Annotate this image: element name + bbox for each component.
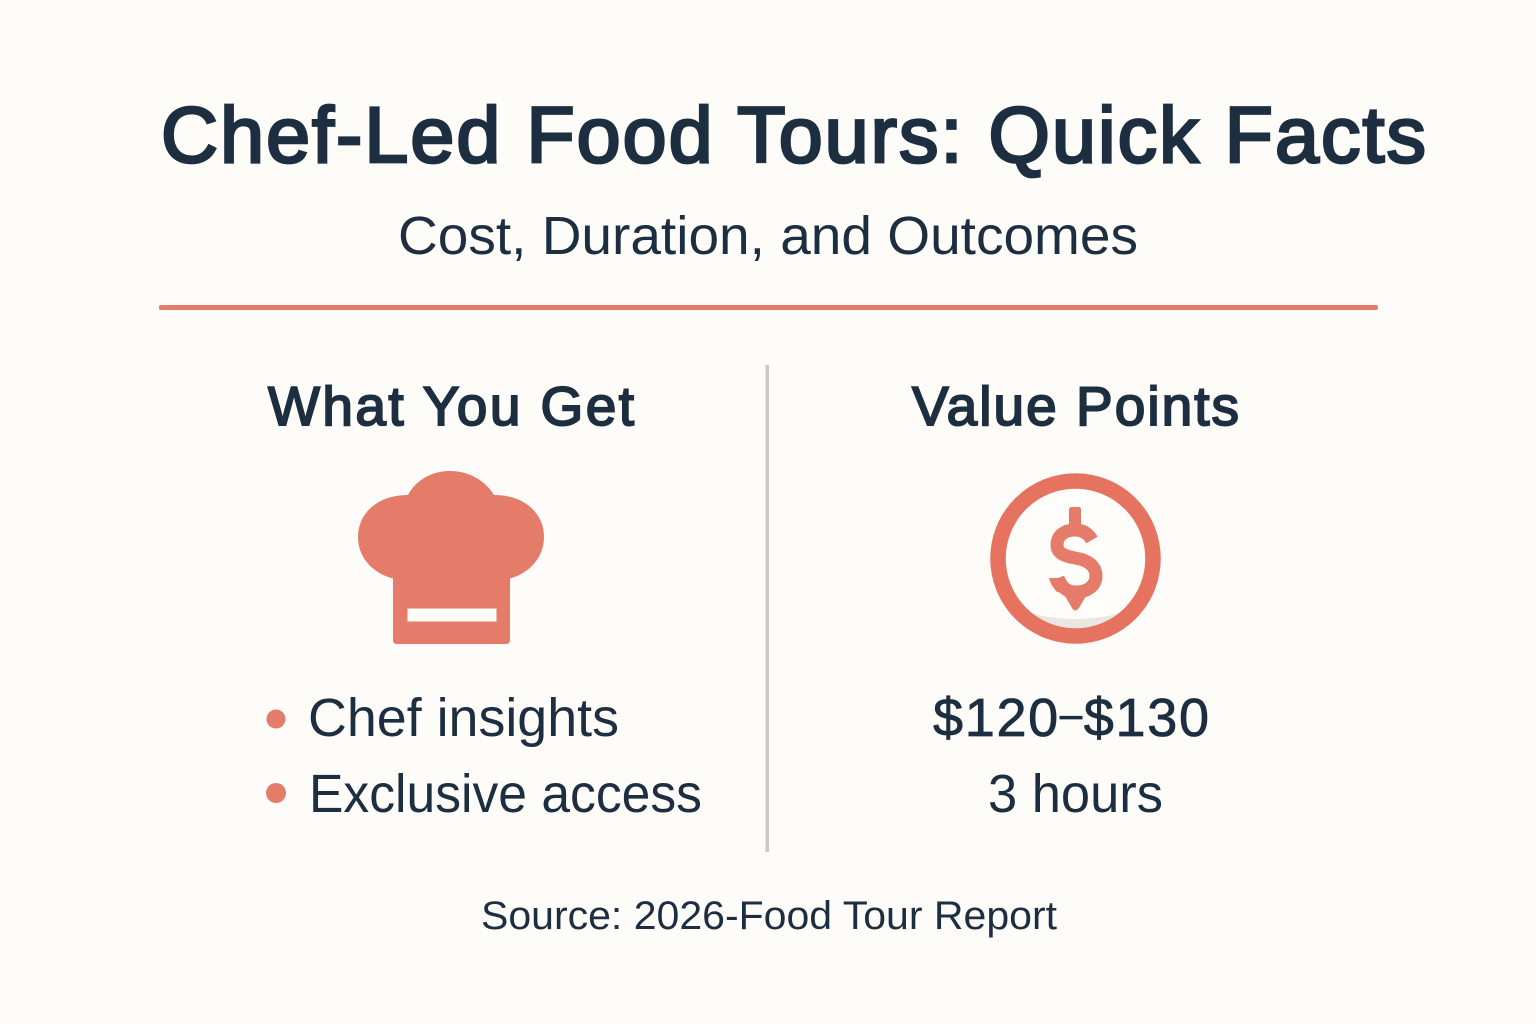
- price range: –: [1060, 693, 1083, 737]
- bullet: chef insights: Chef insights: [308, 688, 619, 748]
- duration: 3 hours: [988, 764, 1163, 824]
- price range: $130: [1084, 688, 1209, 748]
- subtitle: Cost, Duration, and Outcomes: [398, 206, 1138, 266]
- panel: what you get: [266, 375, 702, 824]
- bullet list: [266, 688, 702, 824]
- icon: chef hat: [358, 471, 544, 644]
- heading: value points: Value Points: [912, 375, 1239, 437]
- icon: dollar coin: [998, 481, 1153, 636]
- bullet: exclusive access: Exclusive access: [309, 764, 702, 824]
- price range: $120: [933, 688, 1058, 748]
- source note: Source: 2026-Food Tour Report: [481, 894, 1057, 938]
- heading: what you get: What You Get: [268, 375, 634, 437]
- title: Chef-Led Food Tours: Quick Facts: [161, 90, 1426, 179]
- panel: value points: [912, 375, 1239, 824]
